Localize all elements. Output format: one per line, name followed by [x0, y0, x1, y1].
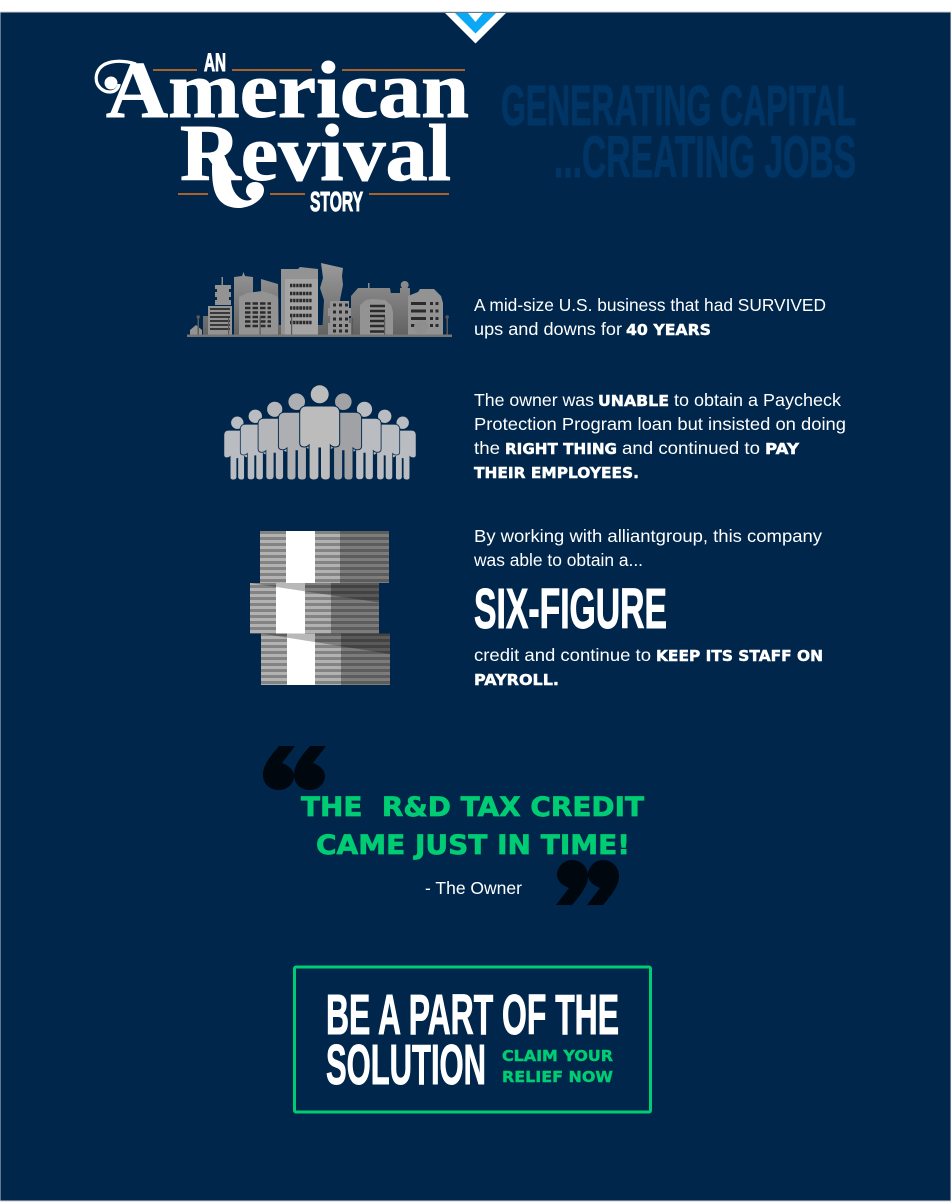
title rule lines [153, 69, 465, 195]
text: six-figure credit: was able to obtain a... [473, 550, 643, 570]
text: unable to obtain a loan [474, 390, 846, 482]
icon: down arrow tab [445, 13, 506, 44]
heading: generating capital, creating jobs [501, 74, 856, 190]
text: unable to obtain a loan: the [474, 438, 500, 458]
icon: closing quote mark [556, 860, 619, 905]
icon: stacks of cash [250, 531, 390, 685]
swash on the letter A [96, 61, 136, 92]
cta link text: CLAIM YOUR [502, 1047, 613, 1065]
text: unable to obtain a loan: PAY [765, 440, 800, 458]
text: six-figure credit: By working with alliantgroup, this company [474, 526, 822, 546]
icon: opening quote mark [263, 746, 326, 790]
text: six-figure credit [473, 526, 823, 689]
skyline lamp posts [196, 315, 449, 335]
title word: Story: STORY [310, 186, 363, 217]
call to action box [294, 967, 650, 1112]
text: survived 40 years: A mid-size U.S. business that had SURVIVED [474, 295, 826, 315]
text: unable to obtain a loan: RIGHT THING [505, 440, 617, 458]
text: unable to obtain a loan: Protection Program loan but insisted on doing [474, 414, 846, 434]
icon: group of employees [224, 385, 416, 480]
title word: American: American [106, 45, 469, 135]
call to action box: RELIEF NOW [502, 1068, 613, 1086]
text: survived 40 years: 40 YEARS [626, 321, 711, 339]
text: six-figure credit: credit and continue to [474, 645, 651, 665]
icon: city skyline [187, 263, 452, 337]
text: unable to obtain a loan: and continued to [622, 438, 760, 458]
quote: R&D tax credit: THE R&D TAX CREDIT [301, 792, 645, 823]
text: six-figure credit: KEEP ITS STAFF ON [656, 647, 823, 665]
big figure: six-figure: SIX-FIGURE [474, 577, 667, 641]
call to action box: SOLUTION [326, 1033, 486, 1097]
title word: Revival: Revival [180, 110, 451, 198]
text: survived 40 years [474, 295, 826, 339]
text: unable to obtain a loan: The owner was [474, 390, 594, 410]
text: unable to obtain a loan: UNABLE [598, 392, 669, 410]
skyline windows [210, 286, 439, 332]
title word: An: AN [204, 49, 226, 77]
quote: R&D tax credit: CAME JUST IN TIME! [316, 830, 630, 861]
cta heading: BE A PART OF THE [326, 983, 619, 1047]
text: six-figure credit: PAYROLL. [474, 671, 559, 689]
title: An American Revival Story [96, 45, 469, 217]
quote attribution: - The Owner [425, 878, 522, 898]
text: unable to obtain a loan: THEIR EMPLOYEES. [474, 464, 639, 482]
quote: R&D tax credit [301, 792, 645, 861]
swash tail on the letter R [212, 152, 264, 208]
text: survived 40 years: ups and downs for [474, 319, 622, 339]
text: unable to obtain a loan: to obtain a Paycheck [674, 390, 841, 410]
